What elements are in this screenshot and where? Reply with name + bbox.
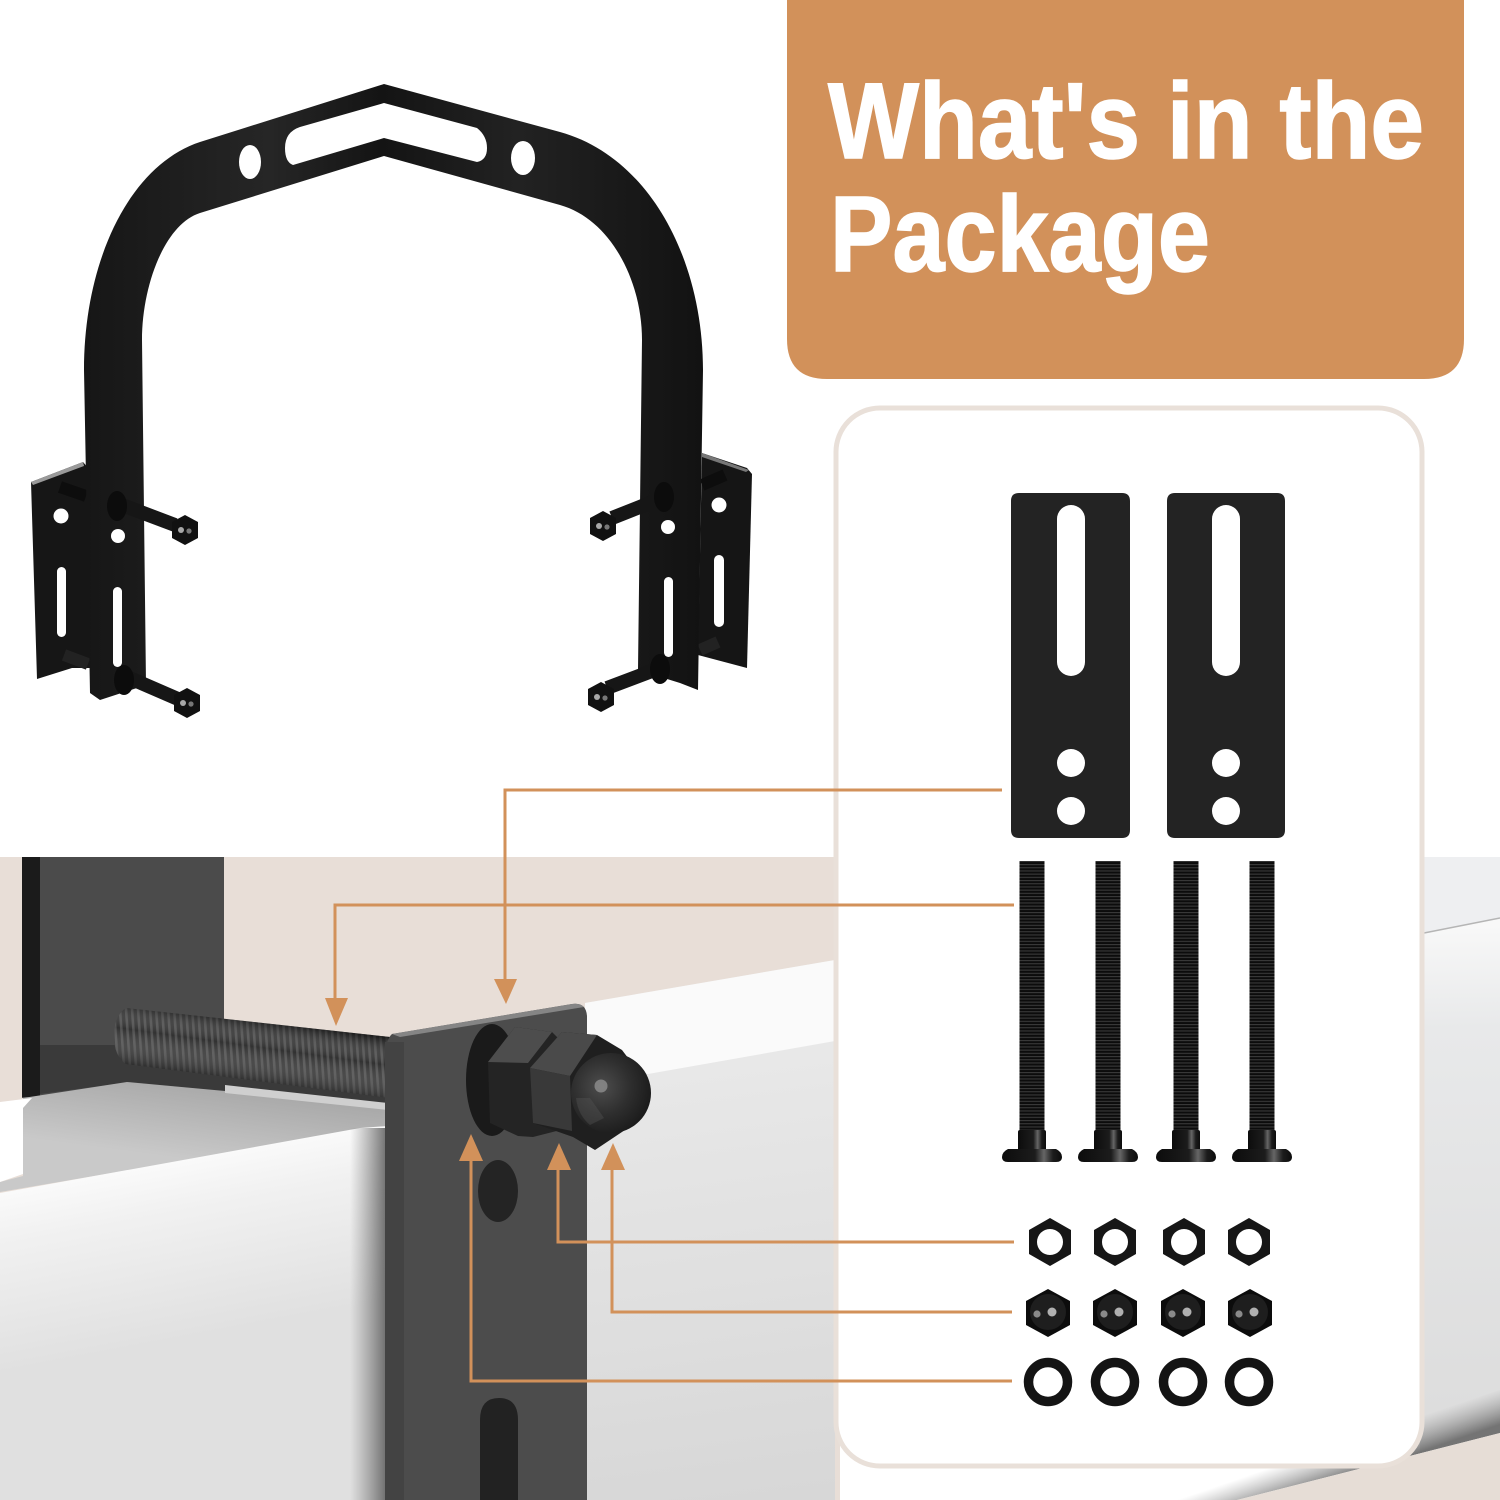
arrow: hex nut (547, 1143, 1014, 1242)
mounting plate 1 (1011, 493, 1130, 838)
arrow: plate to bracket (494, 790, 1002, 1004)
title: Package (830, 173, 1210, 294)
white reflection strip on tub (0, 1098, 32, 1182)
panel: hardware parts (836, 408, 1422, 1466)
tub right section (585, 960, 835, 1500)
product: U-shaped bracket (31, 84, 752, 718)
tub front face (0, 1126, 388, 1500)
mounting plates (1011, 493, 1285, 838)
bolts behind the arms (60, 475, 725, 664)
photo: bracket installed on tub edge (0, 857, 840, 1500)
floor shadow on tub (1170, 1390, 1500, 1500)
right bolts and nuts (588, 482, 674, 712)
tub top surface (0, 1082, 388, 1192)
left back plate (31, 462, 90, 679)
title: What's in the (828, 60, 1424, 181)
floor (1237, 1433, 1500, 1500)
arrow: cap nut (601, 1143, 1012, 1312)
left bolts and nuts (107, 491, 200, 718)
callout arrows (325, 790, 1014, 1381)
right back plate (698, 453, 752, 668)
long threaded bolts (1002, 861, 1292, 1162)
chrome edge highlight (225, 1085, 388, 1110)
header banner (787, 0, 1464, 379)
mounting plate 2 (1167, 493, 1285, 838)
bracket plate (385, 1004, 587, 1500)
cap nuts (1026, 1289, 1272, 1337)
shadow beside bracket (350, 1128, 388, 1500)
threaded bolt (114, 1008, 390, 1098)
washer, nut and cap nut assembly (466, 1024, 651, 1150)
bracket arch (84, 84, 703, 700)
hex nuts (1029, 1218, 1270, 1266)
tub section right of panel (1420, 857, 1500, 1453)
washers (1028, 1362, 1268, 1402)
arrow: bolt (325, 905, 1014, 1026)
arrow: washer (459, 1134, 1012, 1381)
back plate of bracket (22, 857, 390, 1108)
arch holes and slots (111, 141, 675, 667)
